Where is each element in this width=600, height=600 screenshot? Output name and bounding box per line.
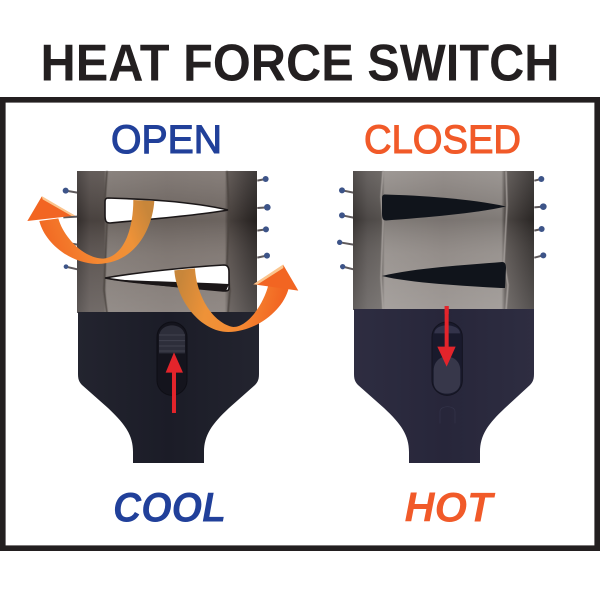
airflow arrow: right: [174, 264, 298, 332]
red arrow: up: [166, 352, 183, 413]
handle: closed: [354, 309, 534, 463]
red arrow: down: [437, 306, 456, 367]
red arrow: down upper shaft: [445, 306, 449, 314]
title: HEAT FORCE SWITCH: [40, 34, 560, 92]
heading: open: OPEN: [111, 118, 222, 162]
airflow arrow: left: [27, 196, 154, 264]
slide switch: open: [157, 322, 187, 395]
bristle pins: open: [63, 176, 271, 269]
label: cool: COOL: [113, 484, 226, 530]
device: closed brush: [337, 171, 547, 463]
slide switch: closed: [432, 322, 462, 423]
slit: closed upper: [382, 194, 506, 220]
device: open brush: [27, 171, 298, 463]
metal barrel: open: [77, 171, 257, 313]
panel frame: [3, 100, 597, 548]
bristle pins: closed: [337, 176, 547, 269]
handle: open: [78, 312, 259, 463]
heading: closed: CLOSED: [364, 118, 521, 162]
slit: open upper: [105, 198, 228, 223]
slit: open lower: [105, 265, 229, 291]
metal barrel: closed: [353, 171, 534, 310]
slit: closed lower: [382, 262, 506, 288]
label: hot: HOT: [404, 484, 496, 530]
